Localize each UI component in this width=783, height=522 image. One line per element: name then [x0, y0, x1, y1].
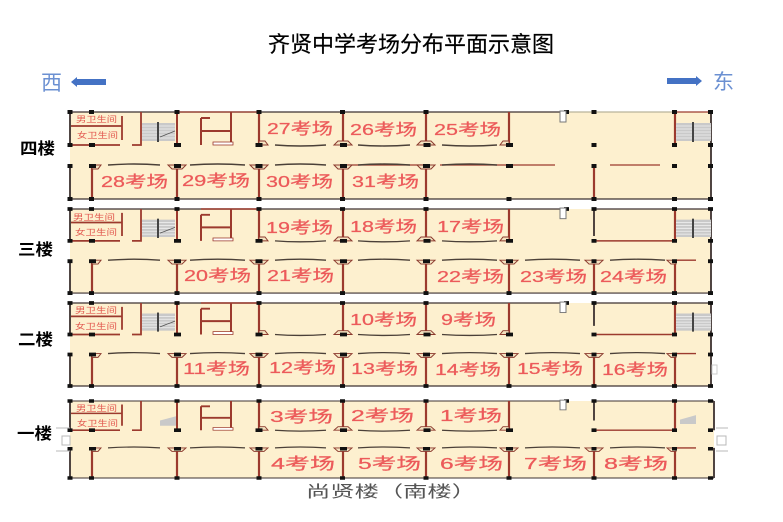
room labels: second floor: 9考场 [441, 311, 496, 329]
room labels: third floor: 24考场 [600, 268, 667, 286]
room labels: third floor: 21考场 [267, 267, 334, 285]
west label: 西 [41, 72, 62, 95]
room labels: first floor: 5考场 [358, 455, 421, 473]
room labels: second floor: 12考场 [269, 359, 336, 377]
room labels: fourth floor: 男卫生间 [76, 114, 117, 124]
panel: third floor plan [68, 207, 713, 295]
room labels: second floor: 女卫生间 [75, 321, 117, 331]
room labels: fourth floor: 25考场 [434, 121, 501, 139]
room labels: third floor: 女卫生间 [75, 227, 117, 237]
room labels: first floor: 1考场 [440, 407, 502, 425]
arrow: east [667, 76, 702, 86]
room labels: third floor: 23考场 [520, 268, 587, 286]
room labels: second floor [75, 305, 668, 379]
east label: 东 [713, 71, 734, 94]
room labels: second floor: 11考场 [183, 360, 250, 378]
room labels: first floor: 7考场 [524, 455, 587, 473]
panel: first floor plan [56, 399, 728, 480]
room labels: second floor: 男卫生间 [75, 305, 117, 315]
room labels: fourth floor: 女卫生间 [77, 130, 118, 140]
room labels: first floor [76, 403, 668, 473]
floor label: 四楼: 四楼 [20, 140, 55, 158]
arrow: west [71, 77, 106, 87]
title: 齐贤中学考场分布平面示意图 [268, 32, 554, 57]
room labels: fourth floor: 26考场 [350, 121, 417, 139]
room labels: second floor: 14考场 [435, 361, 501, 379]
west entrance [56, 428, 70, 451]
room labels: second floor: 16考场 [602, 361, 668, 379]
room labels: fourth floor: 27考场 [267, 120, 333, 138]
room labels: first floor: 女卫生间 [77, 418, 118, 428]
floor label: 三楼: 三楼 [18, 241, 53, 259]
room labels: second floor: 10考场 [350, 311, 417, 329]
floor label: 一楼: 一楼 [17, 425, 52, 443]
room labels: first floor: 8考场 [604, 455, 668, 473]
room labels: fourth floor: 28考场 [101, 173, 168, 191]
room labels: fourth floor: 30考场 [266, 173, 333, 191]
room labels: third floor: 男卫生间 [73, 212, 115, 222]
room labels: first floor: 2考场 [351, 407, 414, 425]
room labels: first floor: 3考场 [270, 408, 333, 426]
building caption: 尚贤楼（南楼） [306, 483, 476, 501]
room labels: fourth floor: 31考场 [352, 173, 419, 191]
room labels: third floor: 22考场 [437, 268, 504, 286]
room labels: third floor: 17考场 [437, 218, 504, 236]
small outline box [712, 365, 717, 374]
room labels: first floor: 4考场 [271, 455, 335, 473]
room labels: second floor: 15考场 [517, 360, 583, 378]
room labels: third floor [73, 212, 667, 286]
panel: second floor plan [68, 301, 717, 388]
floor label: 二楼: 二楼 [18, 331, 53, 349]
room labels: first floor: 6考场 [440, 455, 503, 473]
east entrance [716, 428, 728, 451]
room labels: third floor: 20考场 [184, 267, 251, 285]
room labels: fourth floor: 29考场 [182, 172, 250, 190]
room labels: second floor: 13考场 [351, 360, 418, 378]
room labels: fourth floor [76, 114, 501, 191]
room labels: third floor: 18考场 [350, 218, 417, 236]
room labels: first floor: 男卫生间 [76, 403, 117, 413]
panel: fourth floor plan [68, 110, 713, 201]
room labels: third floor: 19考场 [266, 219, 333, 237]
